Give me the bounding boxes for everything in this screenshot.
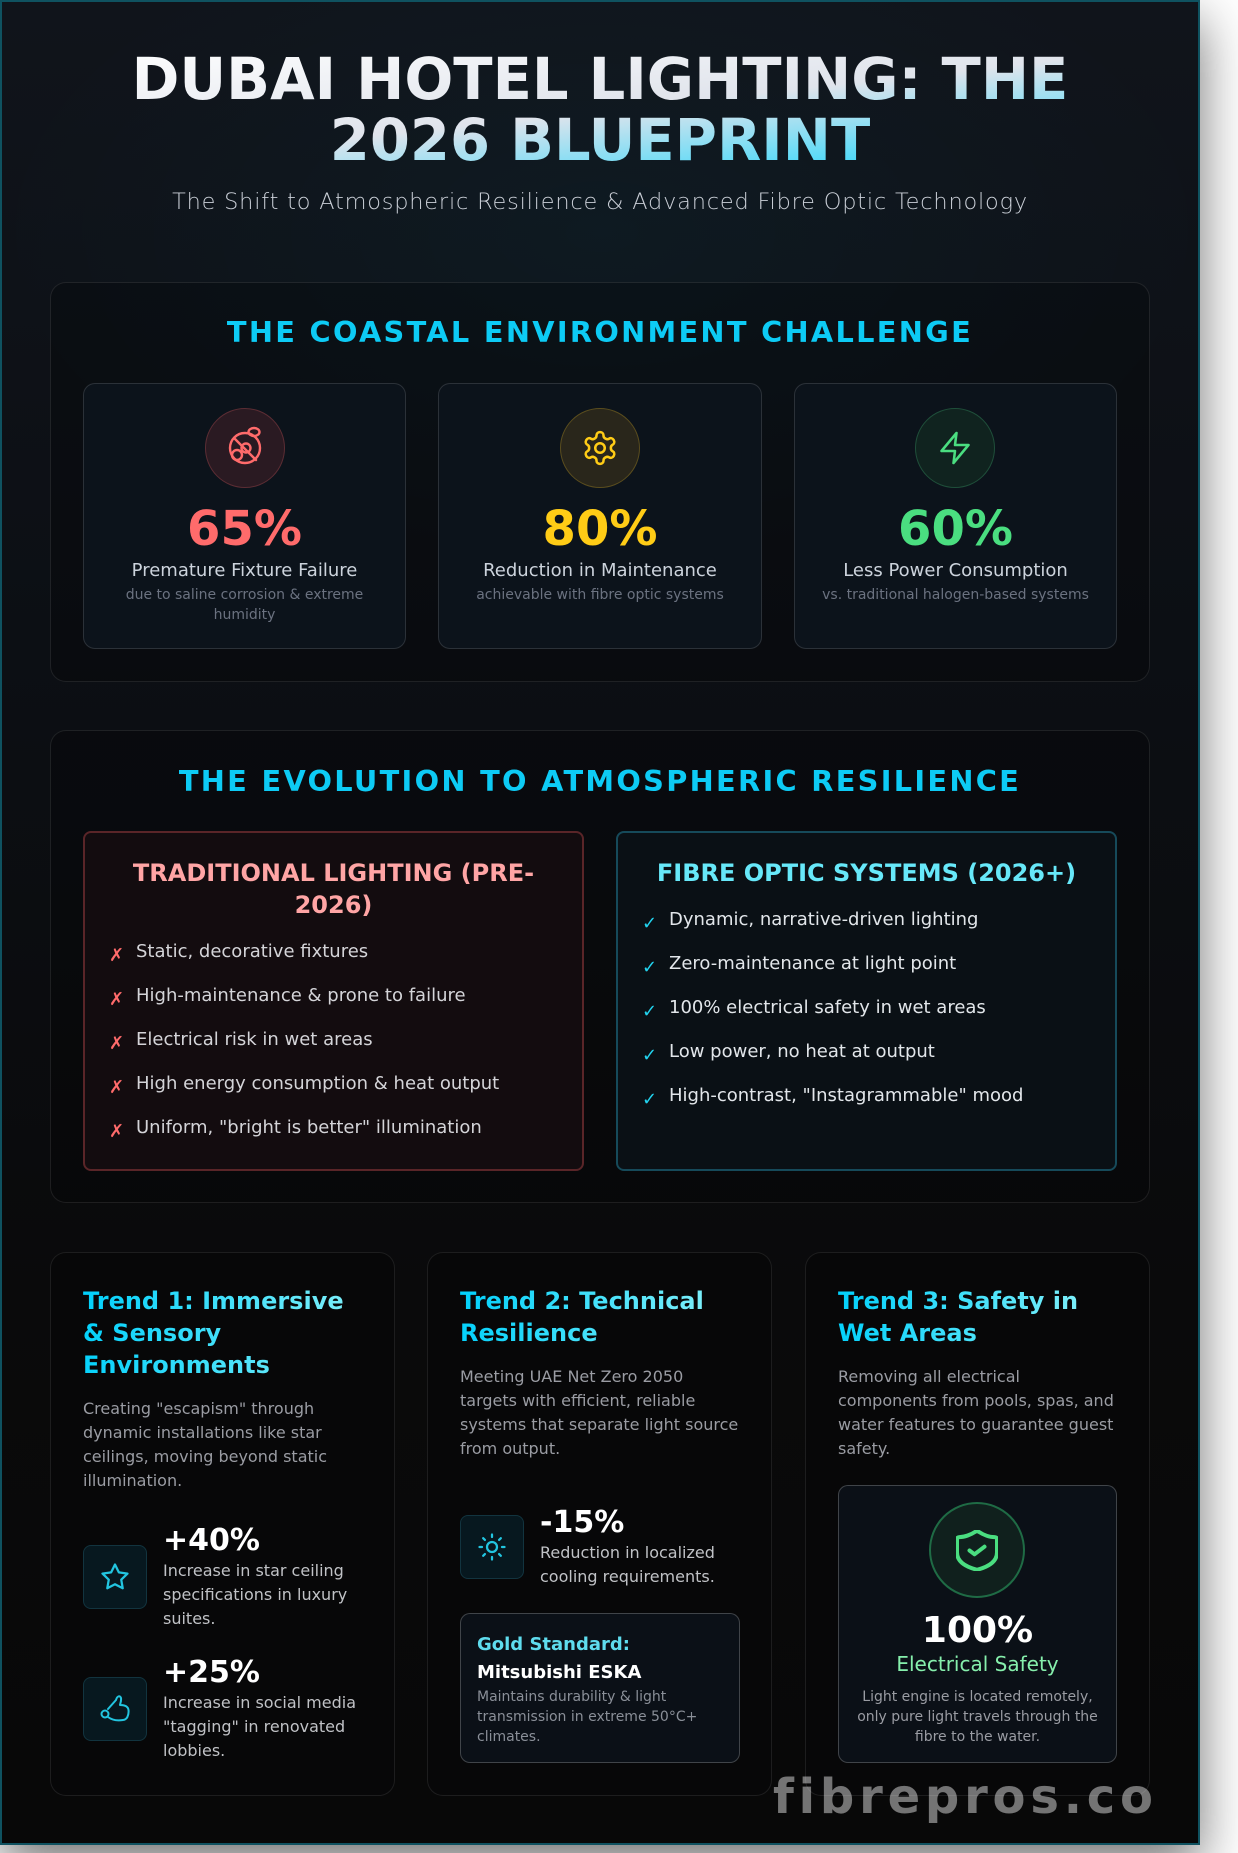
value: 100%: 100% — [922, 1610, 1033, 1651]
list: benefits: ✓ — [642, 1001, 657, 1022]
icon: shield check — [929, 1502, 1025, 1598]
list: drawbacks: ✗ — [109, 1033, 124, 1054]
heading: & Sensory — [83, 1319, 221, 1347]
metric description: Increase in star ceiling — [163, 1561, 344, 1580]
callout label: Gold Standard: — [477, 1634, 630, 1655]
metric description — [163, 1693, 356, 1760]
value: 60% — [898, 501, 1013, 557]
panel: coastal environment challenge — [50, 282, 1150, 682]
trend card 2 — [427, 1252, 772, 1796]
list: benefits: 100% electrical safety in wet areas — [669, 997, 986, 1018]
description: Creating "escapism" through — [83, 1399, 314, 1418]
callout text: climates. — [477, 1729, 541, 1745]
note: vs. traditional halogen-based systems — [822, 587, 1089, 603]
description: from output. — [460, 1439, 560, 1458]
value: 65% — [187, 501, 302, 557]
heading: evolution: THE EVOLUTION TO ATMOSPHERIC RESILIENCE — [179, 764, 1021, 798]
stat card: 60% — [794, 383, 1117, 649]
panel: fibre optic systems — [616, 831, 1117, 1171]
heading: Wet Areas — [838, 1319, 977, 1347]
note: only pure light travels through the — [857, 1709, 1098, 1725]
metric description — [163, 1561, 347, 1628]
heading: coastal challenge: THE COASTAL ENVIRONMENT CHALLENGE — [227, 315, 973, 349]
list: drawbacks: ✗ — [109, 1077, 124, 1098]
list: benefits: ✓ — [642, 1045, 657, 1066]
callout product: Mitsubishi ESKA — [477, 1662, 641, 1683]
list: benefits: ✓ — [642, 913, 657, 934]
note: achievable with fibre optic systems — [476, 587, 724, 603]
metric description: specifications in luxury — [163, 1585, 347, 1604]
metric description: cooling requirements. — [540, 1567, 715, 1586]
description: Meeting UAE Net Zero 2050 — [460, 1367, 683, 1386]
list: benefits: ✓ — [642, 1089, 657, 1110]
icon: star — [83, 1545, 147, 1609]
description: safety. — [838, 1439, 890, 1458]
note: Light engine is located remotely, — [862, 1689, 1093, 1705]
panel heading: FIBRE OPTIC SYSTEMS (2026+) — [657, 859, 1076, 887]
heading — [838, 1285, 1078, 1349]
list: drawbacks: High energy consumption & heat output — [136, 1073, 499, 1094]
value: -15%: -15% — [540, 1505, 624, 1540]
panel heading: TRADITIONAL LIGHTING (PRE-2026) — [133, 859, 534, 919]
metric description: Reduction in localized — [540, 1543, 715, 1562]
list: benefits: Zero-maintenance at light point — [669, 953, 956, 974]
description: targets with efficient, reliable — [460, 1391, 695, 1410]
description: ceilings, moving beyond static — [83, 1447, 327, 1466]
title: 2026 BLUEPRINT — [330, 106, 870, 174]
heading: Resilience — [460, 1319, 598, 1347]
list: benefits: Low power, no heat at output — [669, 1041, 935, 1062]
stat card: 80% — [438, 383, 762, 649]
stat card: 65% — [83, 383, 406, 649]
description — [83, 1399, 327, 1490]
callout: gold standard — [460, 1613, 740, 1763]
trend card 3 — [805, 1252, 1150, 1796]
note: fibre to the water. — [915, 1729, 1040, 1745]
description — [838, 1367, 1114, 1458]
label: Reduction in Maintenance — [483, 560, 717, 581]
value: +40%: +40% — [163, 1523, 260, 1558]
heading: Environments — [83, 1351, 270, 1379]
watermark: fibrepros.co — [773, 1769, 1158, 1825]
label: Less Power Consumption — [843, 560, 1068, 581]
metric description: "tagging" in renovated — [163, 1717, 345, 1736]
description: Removing all electrical — [838, 1367, 1020, 1386]
metric description: lobbies. — [163, 1741, 225, 1760]
list: drawbacks: ✗ — [109, 989, 124, 1010]
heading: Trend 2: Technical — [460, 1287, 704, 1315]
description: components from pools, spas, and — [838, 1391, 1114, 1410]
icon: gear — [560, 408, 640, 488]
heading — [460, 1285, 704, 1349]
list: drawbacks: Electrical risk in wet areas — [136, 1029, 373, 1050]
label: Electrical Safety — [896, 1652, 1059, 1676]
description: systems that separate light source — [460, 1415, 738, 1434]
description: illumination. — [83, 1471, 182, 1490]
panel: traditional lighting — [83, 831, 584, 1171]
callout text — [477, 1689, 697, 1745]
metric description: Increase in social media — [163, 1693, 356, 1712]
heading: Trend 1: Immersive — [83, 1287, 344, 1315]
subtitle: The Shift to Atmospheric Resilience & Advanced Fibre Optic Technology — [172, 189, 1028, 215]
list: drawbacks — [109, 941, 499, 1142]
heading: Trend 3: Safety in — [838, 1287, 1078, 1315]
icon: lightning — [915, 408, 995, 488]
list: benefits: ✓ — [642, 957, 657, 978]
list: drawbacks: ✗ — [109, 1121, 124, 1142]
list: drawbacks: High-maintenance & prone to failure — [136, 985, 466, 1006]
description — [460, 1367, 738, 1458]
callout text: transmission in extreme 50°C+ — [477, 1709, 697, 1725]
callout: electrical safety — [838, 1485, 1117, 1763]
list: benefits — [642, 909, 1023, 1110]
metric description — [540, 1543, 715, 1586]
list: drawbacks: Static, decorative fixtures — [136, 941, 368, 962]
description: dynamic installations like star — [83, 1423, 322, 1442]
list: benefits: High-contrast, "Instagrammable" mood — [669, 1085, 1023, 1106]
metric description: suites. — [163, 1609, 215, 1628]
description: water features to guarantee guest — [838, 1415, 1113, 1434]
heading — [83, 1285, 344, 1381]
value: +25%: +25% — [163, 1655, 260, 1690]
trend card 1 — [50, 1252, 395, 1796]
list: drawbacks: Uniform, "bright is better" illumination — [136, 1117, 482, 1138]
icon: thumbs up — [83, 1677, 147, 1741]
note — [857, 1689, 1098, 1745]
title: DUBAI HOTEL LIGHTING: THE — [132, 46, 1068, 113]
label: Premature Fixture Failure — [132, 560, 357, 581]
title — [50, 50, 1150, 171]
icon: corrosion — [205, 408, 285, 488]
icon: sun — [460, 1515, 524, 1579]
callout text: Maintains durability & light — [477, 1689, 666, 1705]
note: due to saline corrosion & extreme humidity — [126, 587, 363, 623]
list: drawbacks: ✗ — [109, 945, 124, 966]
list: benefits: Dynamic, narrative-driven lighting — [669, 909, 978, 930]
value: 80% — [543, 501, 657, 557]
panel: evolution to atmospheric resilience — [50, 730, 1150, 1203]
